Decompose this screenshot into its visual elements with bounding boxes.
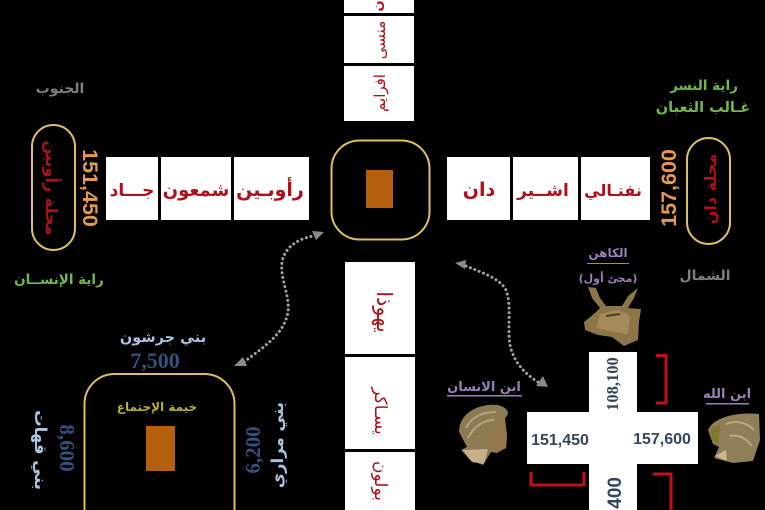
panel: north tribes column (top): ن <box>371 0 386 12</box>
panel: north tribes column (top) <box>344 0 414 121</box>
panel: Reuben camp oval: محلة رأوبين <box>42 141 62 235</box>
panel: tent of meeting <box>84 374 234 510</box>
label: the priest: (مجئ أول) <box>579 271 637 285</box>
number: Dan camp total: 157,600 <box>657 149 681 227</box>
panel: south tribes column (bottom) <box>345 262 415 510</box>
label: son of God: ابن الله <box>703 387 751 402</box>
label: son of man: ابن الانسان <box>447 380 521 395</box>
number: Reuben camp total: 151,450 <box>78 149 102 227</box>
number: east total: 157,600 <box>633 431 691 448</box>
icon: human head <box>459 405 508 465</box>
number: north total: 108,100 <box>603 357 622 411</box>
panel: west tribes row: شمعون <box>163 180 229 201</box>
panel: north tribes column (top): افرايم <box>371 74 389 112</box>
bracket: top right <box>656 356 666 403</box>
label: banner of man: راية الإنســان <box>14 272 104 288</box>
label: banner of eagle <box>656 78 750 116</box>
heading: north: الشمال <box>679 268 731 284</box>
icon: lion head <box>708 414 760 463</box>
number: west total: 151,450 <box>531 432 589 449</box>
panel: central tabernacle <box>332 140 430 240</box>
bracket: lower right <box>653 474 671 510</box>
panel: south tribes column (bottom): يسـاكر <box>370 386 390 435</box>
panel: south tribes column (bottom): بولون <box>370 461 390 501</box>
number: Kohath count: 8,600 <box>55 424 79 472</box>
panel: east tribes row: اشــير <box>516 181 569 201</box>
arrow: dotted to cross diagram <box>455 260 548 387</box>
label: banner of eagle: راية النسر <box>669 78 738 94</box>
label: Gershon sons: بني جرشون <box>120 330 206 346</box>
number: Gershon count: 7,500 <box>130 348 180 373</box>
label: the priest: الكاهن <box>588 246 628 260</box>
panel: east tribes row: دان <box>463 179 495 201</box>
panel: Dan camp oval <box>687 138 730 244</box>
bracket: lower left <box>531 472 584 485</box>
icon: bull head <box>584 287 641 346</box>
panel: west tribes row: جـــاد <box>110 181 154 201</box>
heading: south: الجنوب <box>36 81 84 97</box>
label: Kohath sons: بني قهات <box>30 410 50 490</box>
label: banner of eagle: غـالب الثعبان <box>656 100 750 116</box>
panel: west tribes row: رأوبـين <box>236 177 304 201</box>
panel: south tribes column (bottom): يهوذا <box>372 291 396 333</box>
panel: east tribes row <box>447 157 650 220</box>
panel: east tribes row: نفتـالي <box>584 181 642 201</box>
label: Merari sons: بني مراري <box>268 402 288 488</box>
arrow: dotted to central tabernacle <box>234 231 324 366</box>
panel: Reuben camp oval <box>32 125 75 250</box>
panel: cross of camp totals <box>527 352 698 510</box>
panel: tent of meeting: خيمة الإجتماع <box>117 400 197 414</box>
label: the priest <box>579 246 637 285</box>
panel: Dan camp oval: محلة دان <box>701 154 720 224</box>
number: Merari count: 6,200 <box>241 426 265 474</box>
panel: north tribes column (top): منسى <box>371 21 389 59</box>
panel: west tribes row <box>106 157 309 220</box>
number: south total: 400 <box>605 477 626 509</box>
